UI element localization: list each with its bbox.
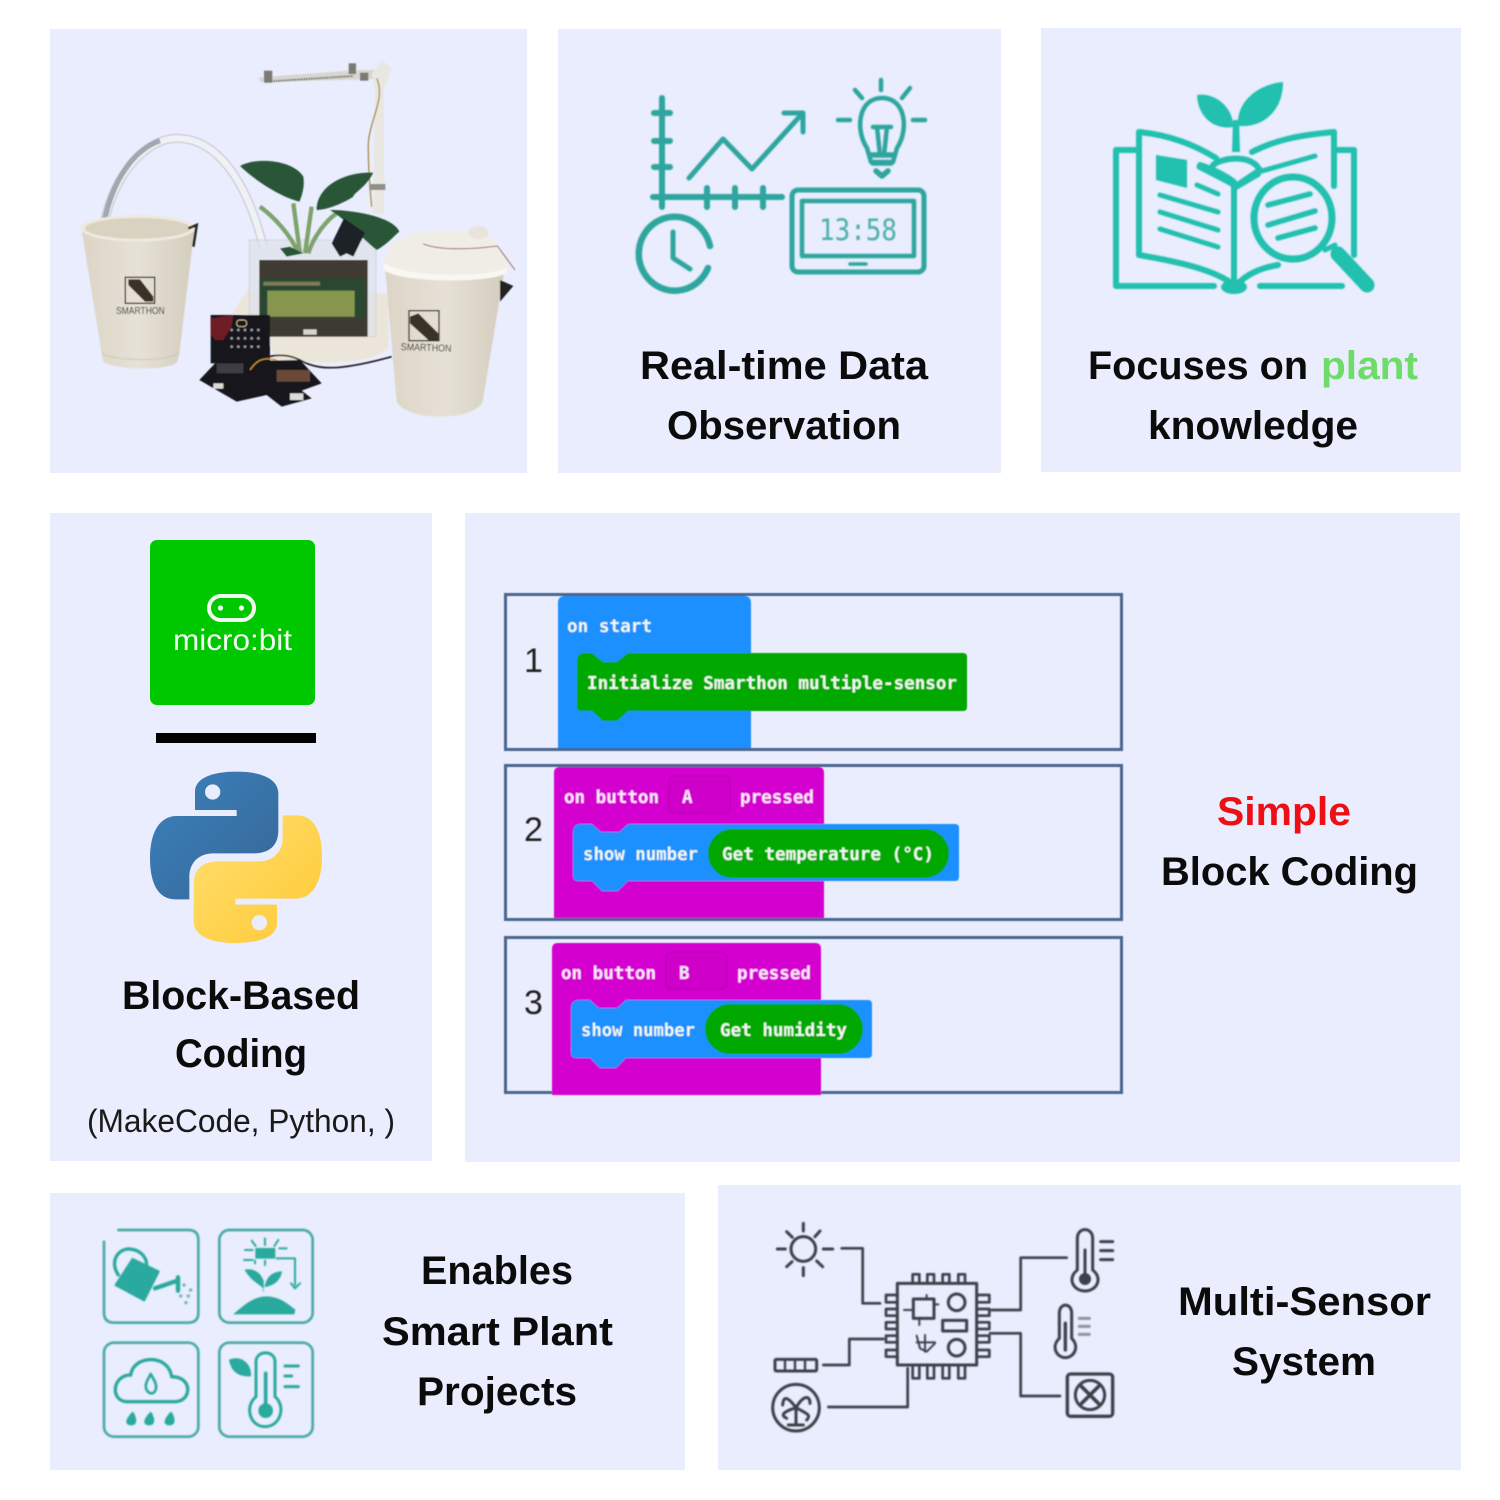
code example 1 — [506, 594, 1122, 750]
wires — [823, 1248, 1067, 1407]
heading: Multi-Sensor — [1178, 1280, 1431, 1324]
code example 3: Get humidity — [720, 1021, 847, 1041]
heading — [1161, 790, 1418, 894]
icon: strip sensor — [775, 1359, 817, 1371]
code example 3 — [506, 938, 1122, 1095]
spine knob — [1221, 280, 1247, 294]
heading: Focuses on — [1088, 344, 1308, 388]
code example 3: show number — [581, 1021, 695, 1041]
icon: open book with sprout and magnifier — [1116, 82, 1367, 294]
soil sensor — [332, 218, 365, 257]
panel: real-time data — [558, 29, 1001, 473]
chart axes — [653, 98, 782, 207]
code example 3: on button — [561, 964, 656, 984]
heading — [640, 344, 929, 448]
sprout — [1197, 82, 1283, 152]
divider bar — [156, 733, 316, 743]
heading: Observation — [667, 404, 901, 448]
right cup — [383, 226, 515, 417]
heading — [382, 1249, 613, 1414]
code example 1: 1 — [524, 642, 543, 680]
logo: micro:bit: micro:bit — [173, 624, 293, 657]
heading — [1178, 1280, 1431, 1384]
panel: multi-sensor system — [718, 1185, 1461, 1470]
icon: small thermometer — [1055, 1305, 1089, 1358]
left cup — [80, 215, 197, 369]
panel: simple block coding — [465, 513, 1460, 1162]
plant stems — [260, 203, 337, 253]
light bulb — [838, 80, 925, 176]
code example 3: pressed — [737, 964, 811, 984]
tray — [232, 292, 388, 363]
soil and LCD — [259, 260, 368, 337]
code example 2: show number — [583, 845, 698, 865]
code example 2 — [506, 766, 1122, 920]
heading: Real-time Data — [640, 344, 929, 388]
heading: Block Coding — [1161, 850, 1418, 894]
photo: smart plant kit — [80, 60, 515, 417]
panel: smart plant projects — [50, 1193, 685, 1470]
right cup: SMARTHON — [401, 342, 452, 355]
heading: Enables — [421, 1249, 573, 1293]
heading: Projects — [417, 1370, 577, 1414]
panel: block-based coding — [50, 513, 432, 1161]
arm and post — [259, 60, 392, 213]
icon: boxed fan — [1067, 1374, 1113, 1416]
icon: leaf and thermometer — [219, 1343, 313, 1437]
heading: Simple — [1217, 790, 1351, 834]
icon: plant with sun and arrow — [219, 1230, 313, 1323]
left cup: SMARTHON — [116, 306, 165, 317]
code example 2: pressed — [740, 788, 814, 808]
code example 2: on button — [564, 788, 659, 808]
magnifier — [1254, 177, 1367, 285]
plant leaves — [240, 161, 399, 257]
digital display — [792, 190, 924, 272]
logo: python — [150, 772, 322, 943]
code example 3: B — [679, 964, 690, 984]
heading: System — [1232, 1340, 1376, 1384]
heading — [122, 974, 360, 1076]
logo: micro:bit — [150, 540, 315, 705]
breakout board — [199, 355, 392, 407]
book outline — [1116, 132, 1354, 286]
heading: Smart Plant — [382, 1310, 613, 1354]
panel: plant knowledge — [1041, 28, 1461, 472]
code example 1: Initialize Smarthon multiple-sensor — [587, 674, 957, 694]
code example 2: Get temperature (°C) — [722, 845, 934, 865]
clock — [639, 217, 710, 291]
icon: sun — [777, 1223, 833, 1276]
micro:bit board — [211, 315, 270, 363]
code example 1: on start — [567, 617, 652, 637]
page square — [1156, 155, 1187, 188]
icon: watering can — [104, 1230, 198, 1323]
chip — [886, 1274, 989, 1378]
icon: chart, clock, bulb, display — [639, 80, 925, 291]
code example 2: 2 — [524, 811, 543, 849]
heading: plant — [1321, 344, 1418, 388]
diagram: sensors wired to chip — [773, 1223, 1113, 1431]
water tube — [105, 138, 263, 247]
heading: Coding — [175, 1032, 307, 1076]
heading — [1088, 344, 1418, 448]
icon: rain cloud — [104, 1343, 198, 1437]
heading: Block-Based — [122, 974, 360, 1018]
icon: large thermometer — [1072, 1230, 1113, 1291]
subtext: (MakeCode, Python, ) — [87, 1103, 395, 1139]
trend arrow — [689, 113, 803, 178]
code example 3: 3 — [524, 984, 543, 1022]
heading: knowledge — [1148, 404, 1358, 448]
icon: fan — [773, 1384, 819, 1431]
panel: product photo — [50, 29, 527, 473]
code example 2: A — [682, 788, 693, 808]
icon grid — [104, 1230, 313, 1437]
digital display: 13:58 — [819, 213, 897, 247]
clear box — [249, 240, 376, 337]
